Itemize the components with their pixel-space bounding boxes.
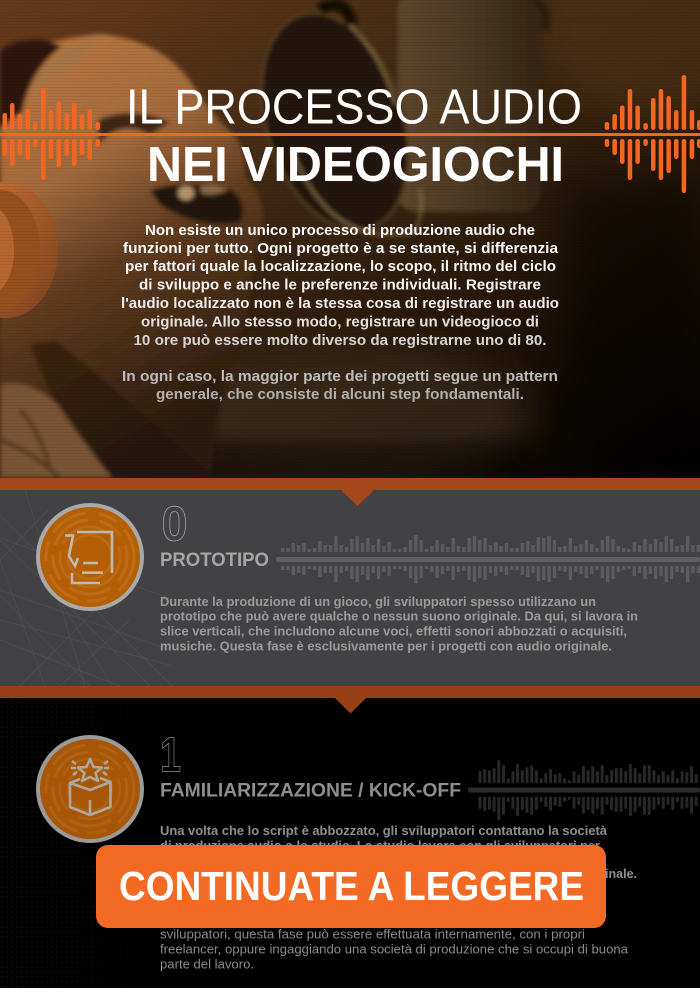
chart: grey waveform <box>276 535 700 583</box>
text block: hero introduction: In ogni caso, la maggior parte dei progetti segue un pattern <box>122 369 558 385</box>
panel: step 0 prototipo <box>0 478 700 686</box>
button: continue reading <box>96 845 606 928</box>
band: second rust divider <box>0 686 700 698</box>
text block: hero introduction: 10 ore può essere molto diverso da registrarne uno di 80. <box>134 333 546 349</box>
heading: familiarizzazione: FAMILIARIZZAZIONE / KICK-OFF <box>160 780 461 802</box>
text block: hero introduction: per fattori quale la localizzazione, lo scopo, il ritmo del ciclo <box>125 259 556 275</box>
text block: familiarizzazione description, lower: sviluppatori, questa fase può essere effettuata internamente, con i propri <box>160 928 585 942</box>
text block: hero introduction: originale. Allo stesso modo, registrare un videogioco di <box>141 314 539 330</box>
icon: familiarizzazione badge <box>38 737 142 841</box>
icon: right orange waveform <box>605 75 700 193</box>
icon: left orange waveform <box>2 88 100 180</box>
text block: hero introduction <box>121 223 559 403</box>
text block: prototipo description: Durante la produzione di un gioco, gli sviluppatori spesso utilizzano un <box>160 595 596 609</box>
arrow: top divider notch <box>341 490 374 506</box>
text block: hero introduction: funzioni per tutto. Ogni progetto è a se stante, si differenzia <box>123 241 559 257</box>
button: continue reading: CONTINUATE A LEGGERE <box>119 863 584 909</box>
chart: dark waveform <box>468 760 700 820</box>
text block: prototipo description: prototipo che può avere qualche o nessun suono originale. Da qui, si lavora in <box>160 610 638 624</box>
text block: hero introduction: l'audio localizzato non è la stessa cosa di registrare un audio <box>121 296 559 312</box>
band: top rust divider <box>0 478 700 490</box>
heading: line 1: IL PROCESSO AUDIO <box>126 80 582 134</box>
text block: familiarizzazione description, upper <box>160 824 637 881</box>
text block: familiarizzazione description, lower: parte del lavoro. <box>160 958 254 972</box>
text block: prototipo description <box>160 595 638 654</box>
text block: familiarizzazione description, lower: freelancer, oppure ingaggiando una società di produzione che si occupi di buona <box>160 943 628 957</box>
number: 0: 0 <box>162 498 188 552</box>
number: 1: 1 <box>160 728 181 782</box>
text block: familiarizzazione description, upper: Una volta che lo script è abbozzato, gli sviluppatori contattano la società <box>160 824 607 838</box>
text block: familiarizzazione description, lower <box>160 928 628 972</box>
text block: hero introduction: di sviluppo e anche le preferenze individuali. Registrare <box>139 278 541 294</box>
panel: hero background photo <box>0 0 700 480</box>
text block: familiarizzazione description, upper: di produzione audio o lo studio. Lo studio lavora con gli sviluppatori per <box>160 839 600 853</box>
text block: prototipo description: musiche. Questa fase è esclusivamente per i progetti con audio originale. <box>160 640 612 654</box>
text block: hero introduction: generale, che consiste di alcuni step fondamentali. <box>156 387 524 403</box>
icon: prototipo badge <box>38 505 142 609</box>
arrow: second divider notch <box>335 698 366 714</box>
text block: familiarizzazione description, upper: originale. <box>581 867 637 881</box>
heading: line 2: NEI VIDEOGIOCHI <box>147 138 564 192</box>
text block: hero introduction: Non esiste un unico processo di produzione audio che <box>145 223 535 239</box>
panel: step 1 familiarizzazione <box>0 686 700 988</box>
divider: orange title rule <box>0 133 700 136</box>
text block: prototipo description: slice verticali, che includono alcune voci, effetti sonori abbozzati o acquisiti, <box>160 625 627 639</box>
heading: prototipo: PROTOTIPO <box>160 549 269 571</box>
